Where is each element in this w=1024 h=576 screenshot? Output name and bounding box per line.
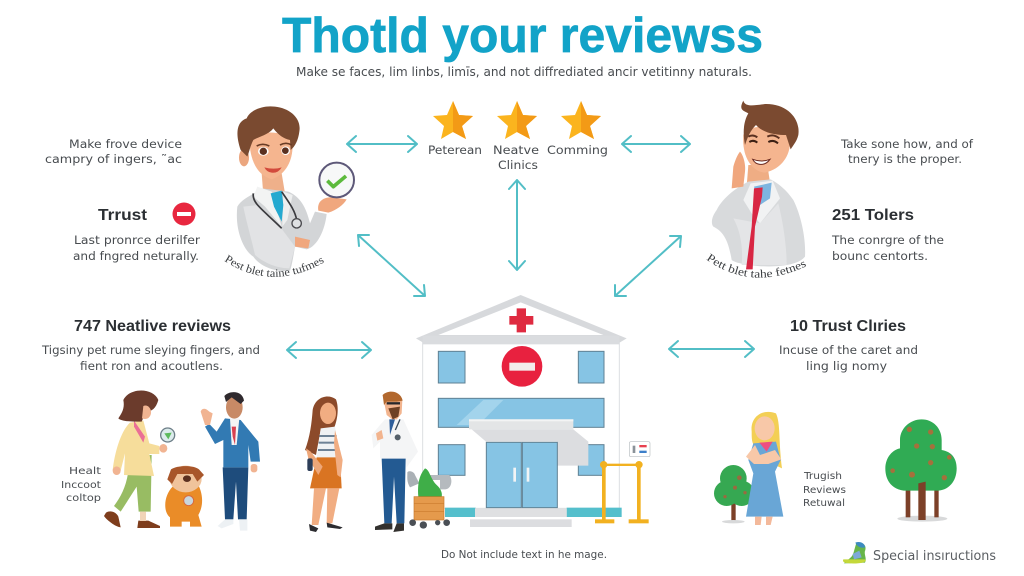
windows xyxy=(438,351,604,475)
caption: health: Inccoot xyxy=(61,480,101,491)
star labels: Comming xyxy=(547,143,608,157)
text block: trust description: and fngred neturally. xyxy=(73,249,199,263)
arrow: top right double xyxy=(622,136,690,152)
star labels: Clinics xyxy=(498,158,538,172)
woman with magnifier xyxy=(104,390,175,528)
text block: top left xyxy=(45,137,182,166)
arrow: middle left double xyxy=(287,342,371,358)
canopy xyxy=(469,419,588,466)
caption: reviews xyxy=(803,471,846,509)
doctor with glasses xyxy=(372,392,418,532)
arrow: centre vertical double xyxy=(509,180,525,270)
caption: reviews: Trugish xyxy=(803,471,842,482)
caption: reviews: Reviews xyxy=(803,485,846,496)
caption: health xyxy=(61,466,101,504)
heading: tolers: 251 Tolers xyxy=(832,207,914,224)
caption: reviews: Retuwal xyxy=(803,498,845,509)
small sign xyxy=(629,442,650,457)
illustration: doctor touching face xyxy=(706,100,806,278)
text block: trust description xyxy=(73,233,200,263)
heading: trust with no-entry icon xyxy=(98,202,196,226)
curved caption: Pett blet tahe fetnes xyxy=(706,253,806,278)
icon: no entry sign xyxy=(502,346,542,387)
heading: trust clinics: 10 Trust Clıries xyxy=(790,318,906,335)
small tree xyxy=(714,465,754,523)
doors xyxy=(486,442,557,508)
text block: top right: Take sone how, and of xyxy=(840,137,974,151)
text block: top right xyxy=(840,137,974,166)
arrow: right diagonal double xyxy=(615,236,681,296)
text block: tolers description xyxy=(831,233,944,263)
woman in orange shorts xyxy=(305,396,343,532)
dog xyxy=(165,466,204,527)
arrow: middle right double xyxy=(669,341,754,357)
star labels xyxy=(428,143,608,172)
man in suit xyxy=(201,392,260,531)
text block: trust description: Last pronrce derilfer xyxy=(74,233,200,247)
illustration: doctor with check badge xyxy=(224,106,355,277)
text block: top left: Make frove device xyxy=(69,137,182,151)
star 2 xyxy=(497,101,537,139)
curved caption: Pest blet taine tufmes xyxy=(224,254,324,277)
star ratings row xyxy=(433,101,601,139)
illustration: hospital building xyxy=(416,295,650,527)
icon: red cross xyxy=(509,308,533,332)
star labels: Neatve xyxy=(493,143,539,157)
heading: trust with no-entry icon: Trrust xyxy=(98,207,148,224)
arrow: top left double xyxy=(347,136,417,152)
illustration: woman, doctor and cart xyxy=(305,392,451,532)
star 1 xyxy=(433,101,473,139)
text block: tolers description: bounc centorts. xyxy=(832,249,928,263)
caption: health: coltop xyxy=(66,493,101,504)
illustration: blonde woman, trees and mascot xyxy=(714,412,957,563)
title: Thotld your reviewss xyxy=(282,9,763,63)
footer: special instructions: Special insıructions xyxy=(873,548,996,564)
building body xyxy=(423,342,619,508)
star 3 xyxy=(561,101,601,139)
star labels: Peterean xyxy=(428,143,482,157)
icon: mascot xyxy=(843,542,866,563)
text block: trust clinics description xyxy=(779,343,918,373)
footer note: Do Not include text in he mage. xyxy=(441,548,607,561)
illustration: woman, dog and man in suit xyxy=(104,390,260,531)
arrow: left diagonal double xyxy=(358,235,425,296)
text block: negative reviews description: Tigsiny pet rume sleying fingers, and xyxy=(41,343,260,357)
icon: check badge xyxy=(319,163,354,197)
text block: negative reviews description: fient ron and acoutlens. xyxy=(80,359,223,373)
text block: tolers description: The conrgre of the xyxy=(831,233,944,247)
text block: negative reviews description xyxy=(41,343,260,373)
large tree xyxy=(885,419,957,522)
text block: trust clinics description: ling lig nomy xyxy=(806,359,887,373)
text block: trust clinics description: Incuse of the caret and xyxy=(779,343,918,357)
heading: negative reviews: 747 Neatlive reviews xyxy=(74,318,231,335)
barrier xyxy=(595,461,649,523)
foundation and steps xyxy=(445,508,622,527)
roof xyxy=(416,295,627,344)
text block: top left: campry of ingers, ˜ac xyxy=(45,152,182,166)
subtitle: Make se faces, lim linbs, limīs, and not diffrediated ancir vetitinny naturals. xyxy=(296,65,752,79)
caption: health: Healt xyxy=(69,466,101,477)
blonde woman xyxy=(746,412,783,525)
cart with green creature xyxy=(407,468,451,529)
text block: top right: tnery is the proper. xyxy=(848,152,962,166)
